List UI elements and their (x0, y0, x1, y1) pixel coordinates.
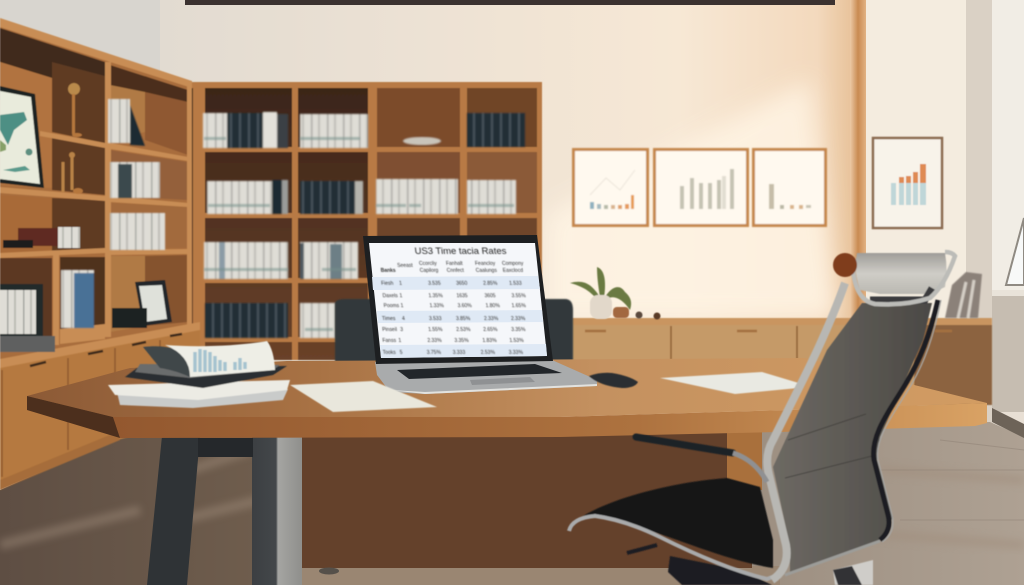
chair backrest (773, 303, 932, 573)
chair right frame (873, 300, 938, 540)
books row 2 (207, 179, 516, 214)
center bookcase (190, 82, 542, 360)
right wall column (866, 0, 966, 320)
desk crossbar (198, 438, 253, 457)
screen table text: 1.35% (428, 293, 444, 299)
screen table text: 1.533 (509, 281, 522, 287)
right cabinet (572, 318, 992, 407)
screen table text: 1.83% (482, 338, 498, 344)
wall chart frame 1 (574, 150, 648, 226)
screen table text: Fanhalt (446, 261, 464, 267)
mouse (589, 373, 638, 388)
world map frame (0, 86, 44, 188)
screen table text (371, 246, 534, 356)
screen table text: 1 (399, 281, 403, 287)
screen table text: Daxels (382, 293, 399, 299)
trophy ornaments (63, 83, 83, 194)
books row 3 (204, 242, 358, 279)
books row 4 (205, 303, 336, 338)
screen table text: 1.55% (428, 327, 443, 333)
screen table text: Compony (502, 261, 524, 267)
shelf books (61, 99, 165, 328)
floor (0, 422, 1024, 585)
screen table text: 3.35% (454, 338, 470, 344)
red book stack (3, 227, 80, 248)
screen table text: Fanss (382, 338, 397, 344)
screen table text: 3.55% (511, 293, 527, 299)
screen table text: Feancloy (475, 261, 496, 267)
window (992, 0, 1024, 412)
screen table text: Eaxclocd (502, 268, 524, 274)
screen table text: 1 (399, 293, 403, 299)
screen table text: 2.33% (484, 316, 499, 322)
office chair behind laptop (335, 299, 573, 362)
wooden wall post (850, 0, 866, 320)
screen table text: 1.33% (429, 303, 445, 309)
wall chart frame 2 (654, 150, 748, 226)
screen table text: 4 (402, 316, 405, 322)
decorative bowl (403, 137, 441, 145)
armrest (636, 437, 767, 482)
screen table text: Cnnfect (446, 268, 465, 274)
screen table text: 3.75% (427, 350, 442, 356)
screen table text: 3.333 (453, 350, 466, 356)
lower drawers (0, 330, 200, 490)
screen table text: Banks (380, 268, 396, 274)
keyboard (397, 364, 562, 379)
screen table text: US3 Time tacia Rates (414, 246, 507, 257)
screen table text: 3 (400, 327, 404, 333)
back wall (160, 0, 852, 445)
headrest (833, 252, 955, 304)
screen table text: Pooms (383, 303, 400, 309)
office chair (569, 252, 955, 585)
screen table text: 3.533 (429, 316, 442, 322)
screen table text: 2.65% (483, 327, 498, 333)
screen table text: Seeast (397, 263, 414, 269)
screen table text: Capilorg (419, 268, 439, 274)
desk front panel (302, 430, 752, 568)
screen table text: 1 (400, 303, 404, 309)
screen table text: 5 (400, 350, 403, 356)
paper on desk (290, 381, 437, 412)
screen table text: Ccorcliy (419, 261, 438, 267)
screen table text: Fiesh (381, 281, 394, 287)
caster (319, 568, 339, 574)
screen table text: Times (382, 316, 396, 322)
left bookcase (0, 18, 200, 490)
left wall section (0, 0, 160, 100)
screen table text: 3605 (484, 293, 496, 299)
far desk support (727, 430, 762, 490)
trackpad (470, 377, 535, 385)
screen table text: 3.33% (509, 350, 524, 356)
wall chart frame 4 (873, 138, 942, 228)
wall chart frame 3 (754, 150, 826, 226)
screen table text: 2.33% (427, 338, 443, 344)
items on far right (945, 272, 982, 318)
screen table text: 2.33% (511, 316, 526, 322)
desk leg left (147, 436, 200, 585)
chair base (627, 545, 873, 585)
stack of books with open magazine (108, 341, 290, 408)
books row 1 (203, 112, 525, 148)
framed books lower left (0, 284, 55, 352)
photo frame and dark stack (112, 280, 172, 328)
desk top (27, 358, 987, 438)
screen (369, 243, 547, 358)
paper right of desk (660, 372, 802, 394)
screen bezel (363, 235, 553, 364)
sunlight patch on wall (545, 80, 838, 320)
laptop (363, 235, 597, 394)
screen table text: 3.535 (428, 281, 441, 287)
screen table text: Tooks (383, 350, 397, 356)
screen table text: 1.80% (485, 303, 501, 309)
book label bands (204, 137, 514, 331)
chair left frame (767, 283, 845, 580)
table rows (372, 276, 547, 358)
screen table text: 1635 (456, 293, 468, 299)
seat edge (569, 516, 783, 579)
plant in pot (570, 267, 660, 320)
screen table text: Pinseil (382, 327, 397, 333)
screen table text: 1.53% (509, 338, 525, 344)
screen table text: 3.35% (511, 327, 526, 333)
seat cushion (570, 478, 773, 568)
screen table text: Caalungs (475, 268, 498, 274)
screen table text: 1 (398, 338, 402, 344)
screen table text: 2.85% (483, 281, 498, 287)
screen table text: 2.53% (481, 350, 496, 356)
baseboard (992, 408, 1024, 438)
screen table text: 1.65% (511, 303, 527, 309)
screen table text: 2.53% (456, 327, 471, 333)
screen table text: 3.85% (456, 316, 471, 322)
screen table text: 3.60% (457, 303, 473, 309)
right recess (966, 0, 992, 430)
desk leg center (252, 436, 302, 585)
laptop base (375, 360, 597, 394)
ceiling strip (185, 0, 835, 5)
screen table text: 3650 (456, 281, 468, 287)
